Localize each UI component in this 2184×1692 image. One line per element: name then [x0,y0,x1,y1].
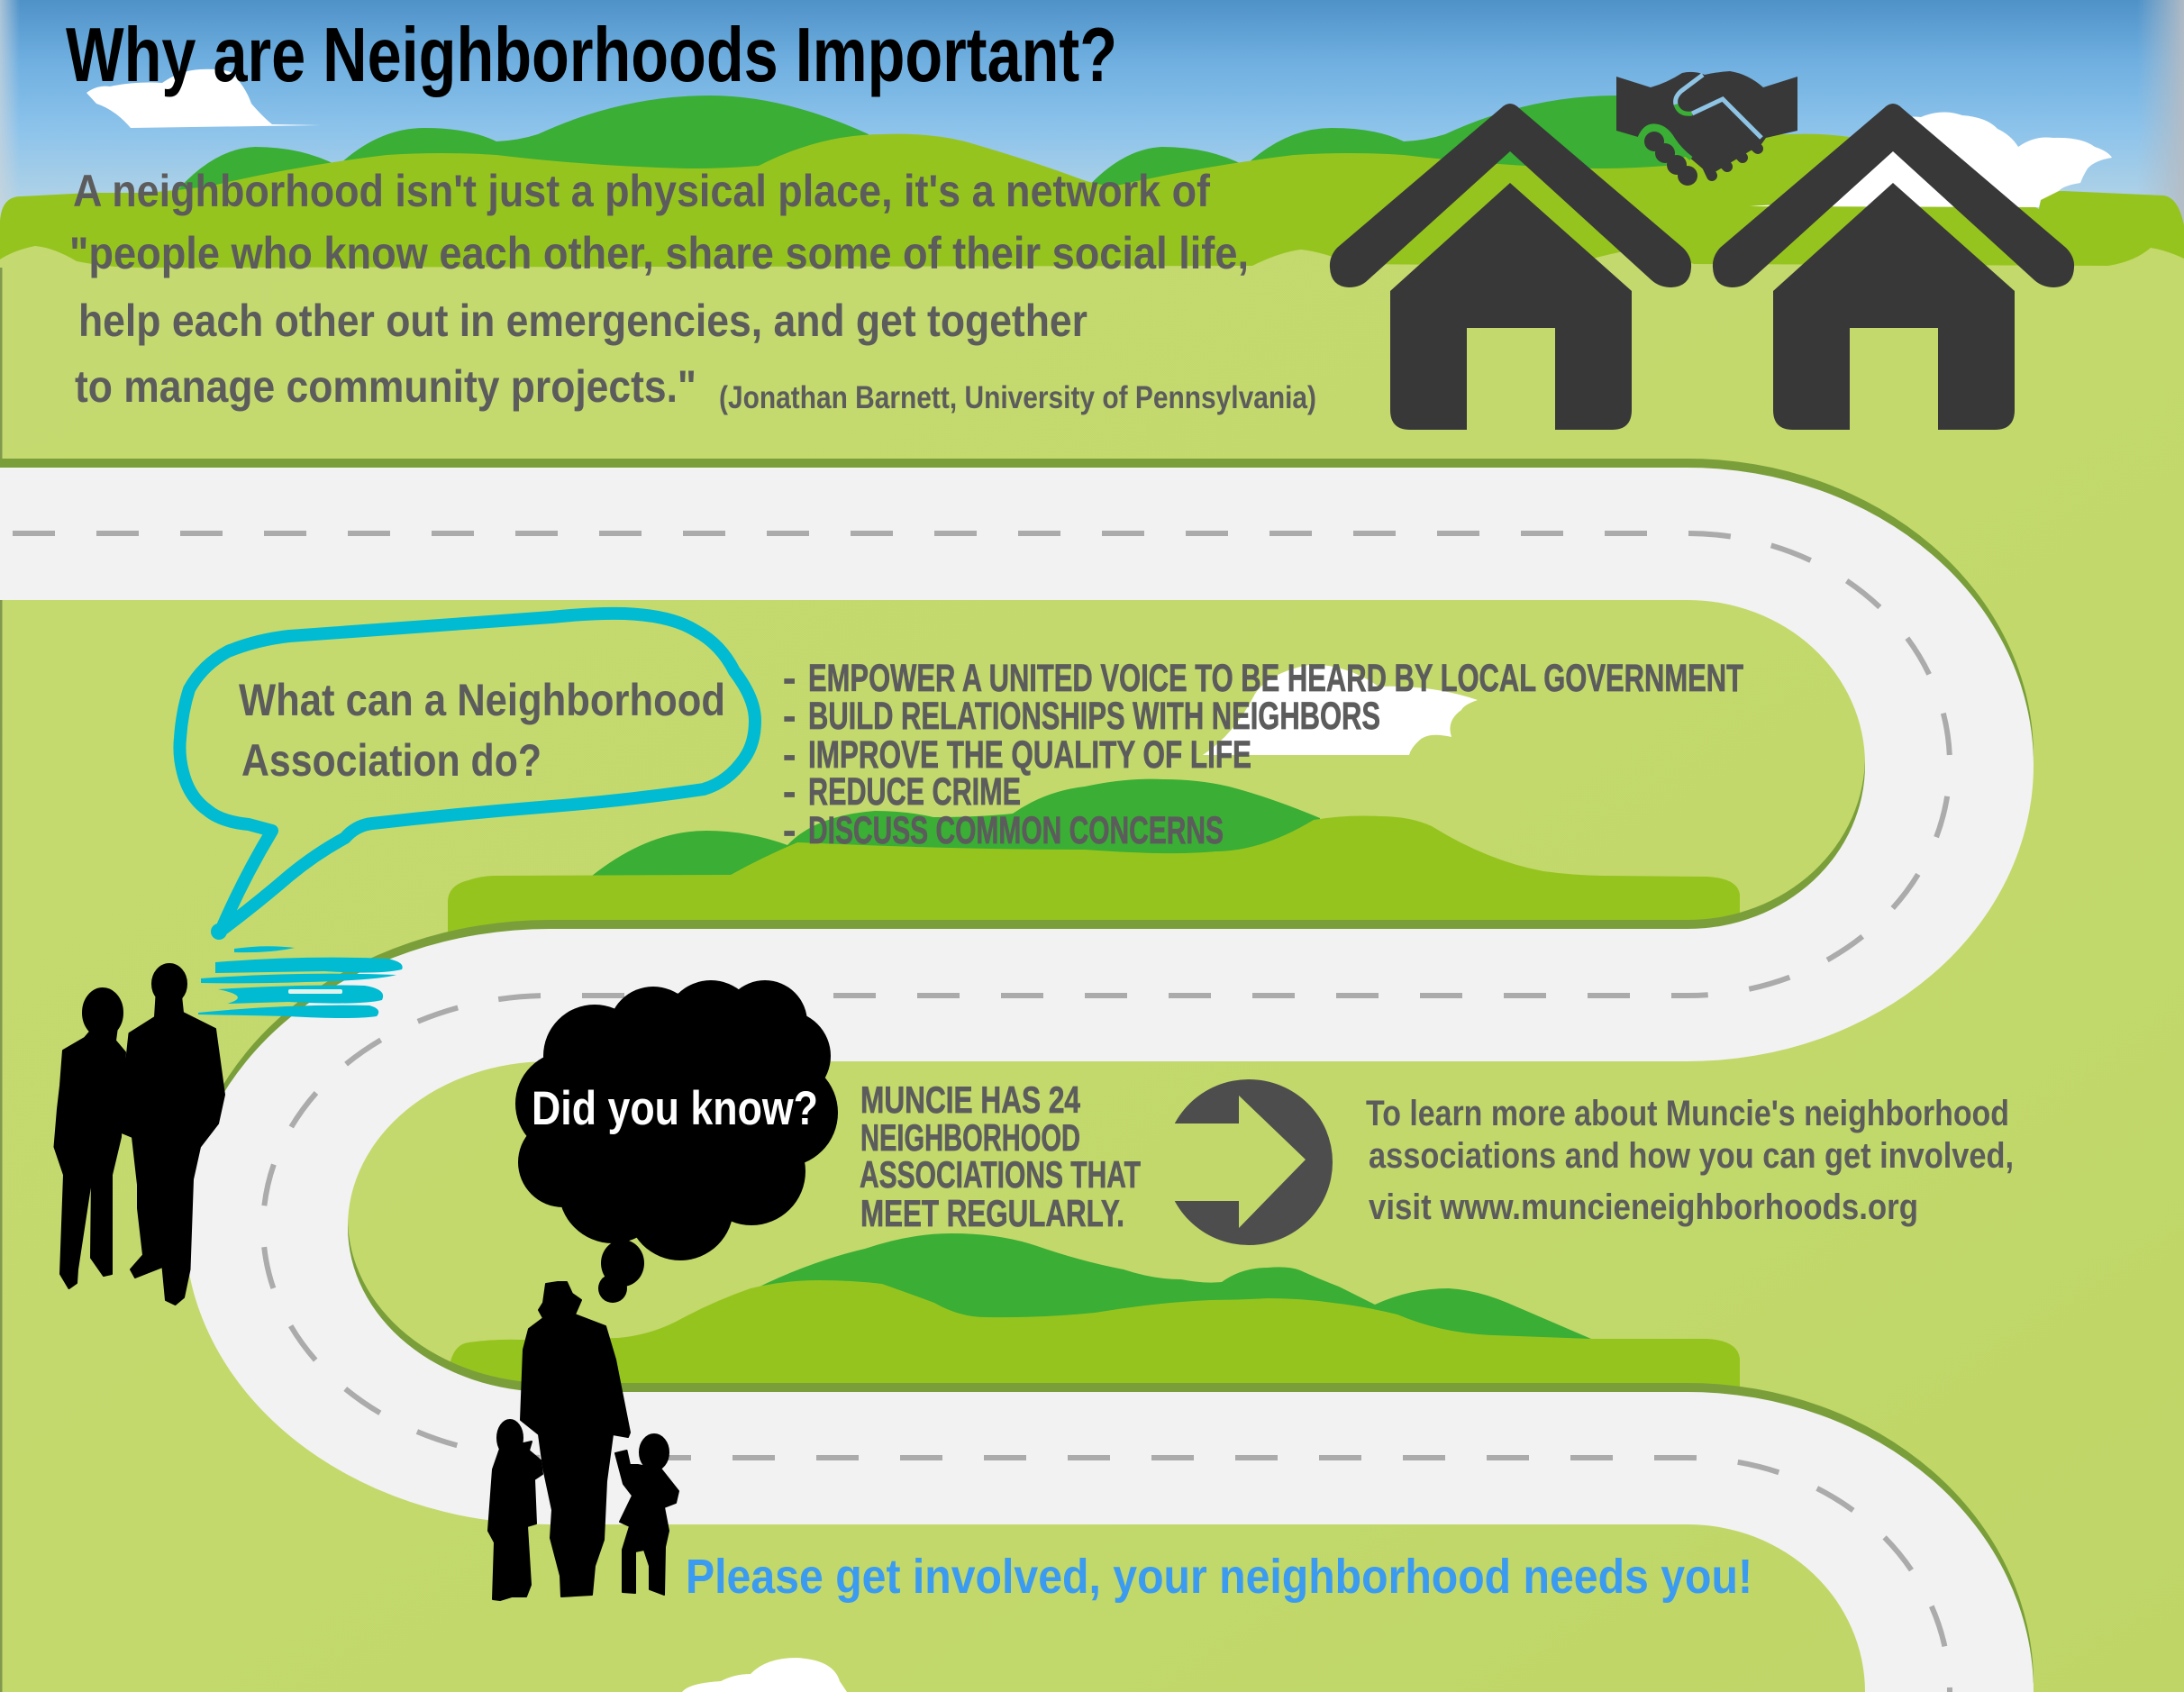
list: what associations do: IMPROVE THE QUALITY OF LIFE [808,733,1251,777]
fact: Muncie associations: MEET REGULARLY. [860,1192,1124,1234]
thought cloud [515,980,838,1303]
list: what associations do [783,657,1743,852]
silhouette: adult with two children [488,1282,678,1600]
cloud: top left [86,69,321,128]
quote paragraph [69,166,1316,415]
quote paragraph: to manage community projects." [75,361,696,412]
hills: lower panel [441,1233,1740,1392]
silhouette: couple [54,964,224,1305]
cloud: behind houses [1750,112,2112,207]
hills: middle panel [448,779,1740,937]
road centre dashes [13,533,1950,1692]
icon: handshake [1616,71,1797,186]
list: what associations do: - [783,809,796,852]
road shadow edge [0,459,2034,1683]
list: what associations do: BUILD RELATIONSHIPS WITH NEIGHBORS [808,695,1380,738]
icon: arrow in circle [1165,1079,1333,1245]
learn more text: To learn more about Muncie's neighborhood [1366,1094,2009,1133]
speech bubble text: Association do? [241,735,541,786]
list: what associations do: - [783,657,796,700]
speech bubble text [239,675,725,786]
speech bubble [179,614,755,940]
fact: Muncie associations: ASSOCIATIONS THAT [860,1153,1141,1196]
quote paragraph: "people who know each other, share some of their social life, [69,228,1249,278]
icon: left house [1330,104,1691,430]
cloud: bottom [682,1658,847,1692]
thought cloud text: Did you know? [532,1082,818,1135]
title: Why are Neighborhoods Important? [66,13,1117,98]
list: what associations do: - [783,695,796,738]
left edge line [0,268,2,1692]
far hills: top [172,96,1776,270]
sky background [0,0,2184,306]
list: what associations do: EMPOWER A UNITED VOICE TO BE HEARD BY LOCAL GOVERNMENT [808,657,1743,700]
list: what associations do: - [783,770,796,814]
quote paragraph: help each other out in emergencies, and get together [78,296,1087,346]
learn more text: associations and how you can get involved, [1369,1136,2014,1176]
fact: Muncie associations: MUNCIE HAS 24 [860,1078,1080,1121]
icon: right house [1713,104,2074,430]
scribble under speech bubble [198,946,403,1018]
speech bubble text: What can a Neighborhood [239,675,725,725]
call to action: Please get involved, your neighborhood needs you! [686,1550,1752,1604]
winding road [0,468,2034,1692]
near hills: top [0,134,2184,288]
quote paragraph: A neighborhood isn't just a physical place, it's a network of [73,166,1210,216]
list: what associations do: - [783,733,796,777]
learn more text [1366,1094,2014,1227]
fact: Muncie associations: NEIGHBORHOOD [860,1116,1080,1159]
quote citation: (Jonathan Barnett, University of Pennsylvania) [719,380,1316,415]
list: what associations do: REDUCE CRIME [808,770,1021,814]
list: what associations do: DISCUSS COMMON CONCERNS [808,809,1224,852]
cloud: middle [1203,664,1478,755]
fact: Muncie associations [860,1078,1141,1234]
learn more text: visit www.muncieneighborhoods.org [1369,1187,1918,1227]
